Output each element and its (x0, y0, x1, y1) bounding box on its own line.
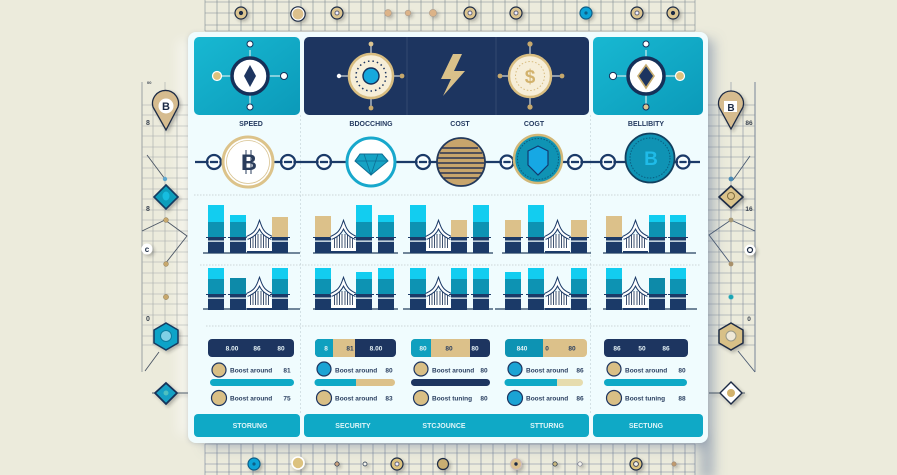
right grid (708, 82, 755, 372)
button: middle (304, 414, 589, 437)
coin: bitcoin gold: B (241, 150, 257, 175)
stat row: 75 (283, 396, 291, 402)
icon: blockchain coin (337, 42, 404, 110)
stat row (212, 363, 291, 377)
group 5 (604, 215, 688, 253)
small labels left: 0 (146, 316, 150, 323)
panel: reliability header (593, 37, 703, 115)
icon: dollar coin: $ (525, 67, 536, 88)
value pill: 8.00 (370, 346, 383, 352)
bar chart row 1 (203, 205, 696, 253)
stat row: Boost around (526, 368, 568, 374)
small labels right (745, 120, 753, 323)
top grid (205, 0, 695, 31)
value pill: 80 (445, 346, 453, 352)
stat row: 80 (678, 368, 686, 374)
panel shadow shading (178, 40, 714, 475)
header labels: COGT (524, 121, 545, 128)
panel: speed header (194, 37, 300, 115)
icon: dollar coin (498, 41, 564, 110)
small labels left (146, 80, 152, 323)
value pill: 80 (471, 346, 479, 352)
group 4 (503, 205, 589, 253)
left grid (142, 82, 188, 372)
header labels (239, 121, 664, 128)
value pill: 8.00 (226, 346, 239, 352)
footer buttons (194, 414, 703, 437)
baselines (203, 308, 697, 310)
button: middle: STCJOUNCE (422, 423, 466, 430)
stat row: 80 (385, 368, 393, 374)
connector lines right (709, 156, 755, 372)
bottom node row (248, 457, 676, 470)
stat row: 83 (385, 396, 393, 402)
panel: navy header (304, 37, 589, 115)
group 2 (313, 268, 396, 310)
progress bar (505, 379, 583, 386)
group 4 (503, 268, 589, 310)
small labels left: 8 (146, 206, 150, 213)
value pill: 80 (568, 346, 576, 352)
progress bar (411, 379, 490, 386)
group 1 (206, 268, 290, 310)
stat row: Boost around (432, 368, 474, 374)
button: middle: SECURITY (335, 423, 371, 430)
coin: stacked gold (437, 138, 485, 186)
header labels: SPEED (239, 121, 263, 128)
group 3 (408, 268, 491, 310)
coin: shield (514, 135, 562, 183)
main panel (188, 32, 708, 443)
header labels: BELLIBITY (628, 121, 664, 128)
stat row: Boost around (335, 396, 377, 402)
group 1 (206, 205, 290, 253)
stat row: Boost tuning (432, 396, 472, 402)
icon: c badge left: c (145, 245, 150, 254)
stat row (508, 390, 584, 406)
right side icons (709, 91, 756, 404)
icon: hexagon left (154, 323, 178, 350)
button: middle: STTURNG (530, 423, 564, 430)
column dividers (300, 115, 590, 414)
coin: bitcoin gold (223, 137, 273, 187)
connector lines left (142, 155, 187, 371)
stat row: Boost around (526, 396, 568, 402)
coin: teal bitcoin (626, 134, 674, 182)
value pill: 840 (517, 346, 528, 352)
icon: c badge right (744, 244, 756, 256)
stats column 1 (208, 339, 294, 406)
small labels left: 00 (147, 80, 152, 85)
value pill (505, 339, 587, 357)
icon: bottom diamond right (709, 382, 745, 404)
group 3 (408, 205, 491, 253)
stat row: 86 (576, 368, 584, 374)
value pill: 81 (346, 346, 354, 352)
stat row (508, 362, 584, 376)
chain (195, 155, 700, 169)
value pill: 86 (613, 346, 621, 352)
icon: tan diamond right (719, 186, 743, 208)
stats column 5 (604, 339, 688, 406)
value pill: 86 (662, 346, 670, 352)
value pill: 8 (324, 346, 328, 352)
stat row: 80 (480, 396, 488, 402)
value pill: 0 (545, 346, 549, 352)
stats column 4 (505, 339, 587, 406)
stat row (606, 390, 686, 406)
value pill: 80 (419, 346, 427, 352)
icon: location pin left: B (162, 101, 170, 113)
value pill: 86 (253, 346, 261, 352)
group 2 (313, 205, 396, 253)
stat row (414, 362, 488, 376)
coin: teal bitcoin: B (644, 149, 658, 170)
value pill (208, 339, 294, 357)
progress bar (314, 379, 395, 386)
stat row: 86 (576, 396, 584, 402)
header labels: COST (450, 121, 470, 128)
icon: c badge left (142, 244, 152, 254)
small labels right: 16 (745, 206, 753, 213)
value pill (411, 339, 490, 357)
stat row: 81 (283, 368, 291, 374)
value pill: 50 (638, 346, 646, 352)
coin: diamond (347, 138, 395, 186)
header labels: BDOCCHING (349, 121, 393, 128)
small labels right: 86 (745, 120, 753, 127)
icon: blue diamond left (154, 185, 178, 209)
button: left (194, 414, 300, 437)
icon: location pin left (153, 90, 178, 130)
stats column 3 (411, 339, 490, 406)
stat row (316, 390, 393, 406)
progress bar (210, 379, 294, 386)
button: right (593, 414, 703, 437)
icon: location pin right (718, 91, 744, 129)
bottom grid (205, 444, 695, 475)
stat row: Boost around (230, 396, 272, 402)
button: left: STORUNG (233, 423, 268, 430)
dotted rules (194, 195, 700, 326)
stat row (414, 390, 488, 406)
progress bar (604, 379, 687, 386)
bar chart row 2 (203, 268, 697, 310)
small labels left: 8 (146, 120, 150, 127)
stat row: Boost around (335, 368, 377, 374)
icon: lightning bolt (441, 54, 465, 96)
baselines (203, 252, 696, 254)
stat row: 80 (480, 368, 488, 374)
small labels right: 0 (747, 316, 751, 323)
value pill: 80 (277, 346, 285, 352)
icon: bottom diamond left (152, 383, 188, 404)
stat row (607, 362, 686, 376)
icon: location pin right: B (727, 103, 735, 114)
top node row (235, 7, 679, 21)
stat row: Boost around (625, 368, 667, 374)
button: right: SECTUNG (629, 423, 664, 430)
left side icons (142, 80, 188, 404)
stat row: 88 (678, 396, 686, 402)
stats column 2 (314, 339, 396, 406)
value pill (604, 339, 688, 357)
stat row: Boost around (230, 368, 272, 374)
stat row (212, 390, 291, 406)
icon: hexagon right (719, 323, 743, 350)
value pill (315, 339, 396, 357)
stat row (317, 362, 393, 376)
group 5 (604, 268, 688, 310)
stat row: Boost tuning (625, 396, 665, 402)
